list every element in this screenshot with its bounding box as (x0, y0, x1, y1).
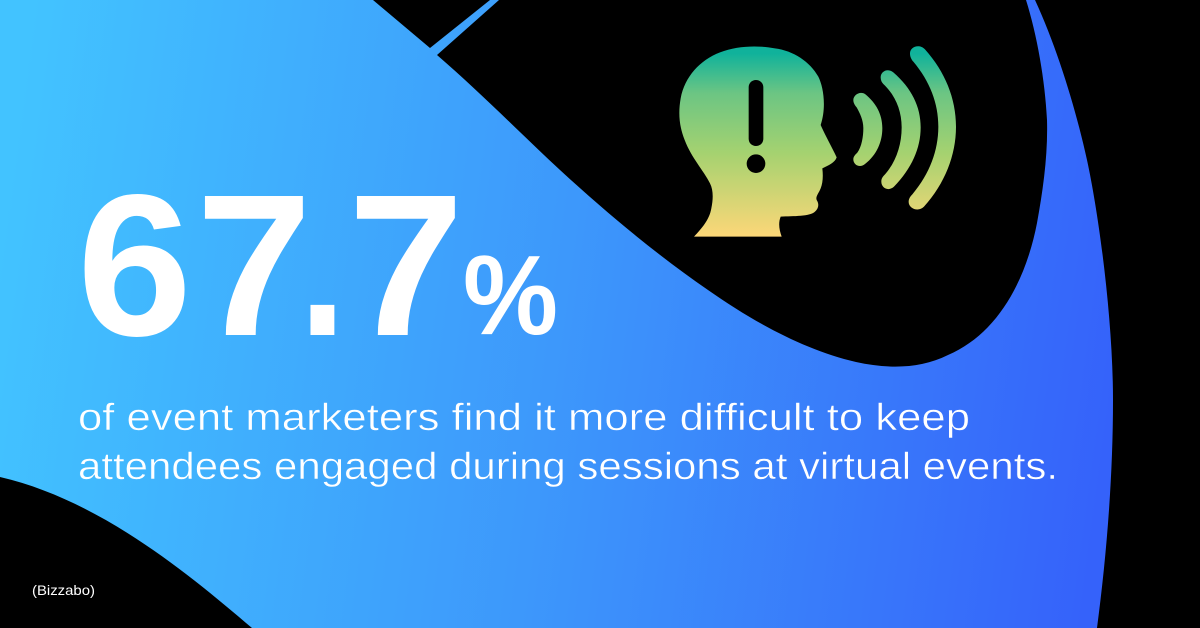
icon: sound wave medium (881, 70, 921, 189)
big statistic: 67.7% (77, 152, 558, 378)
big statistic: 67.7%: . (299, 152, 346, 378)
description text: attendees engaged during sessions at virtual events. (78, 446, 1058, 488)
source: (Bizzabo) (32, 582, 95, 598)
description text (78, 397, 1058, 488)
big statistic: 67.7%: 7 (196, 152, 312, 378)
icon: sound wave small (853, 93, 882, 166)
icon: head silhouette (679, 46, 837, 237)
big statistic: 67.7%: 6 (77, 152, 192, 378)
icon: sound wave large (909, 46, 956, 210)
big statistic: 67.7%: % (463, 232, 558, 358)
big statistic: 67.7%: 7 (348, 152, 464, 378)
description text: of event marketers find it more difficult to keep (78, 397, 970, 439)
icon: speaking head with sound waves (679, 46, 956, 237)
